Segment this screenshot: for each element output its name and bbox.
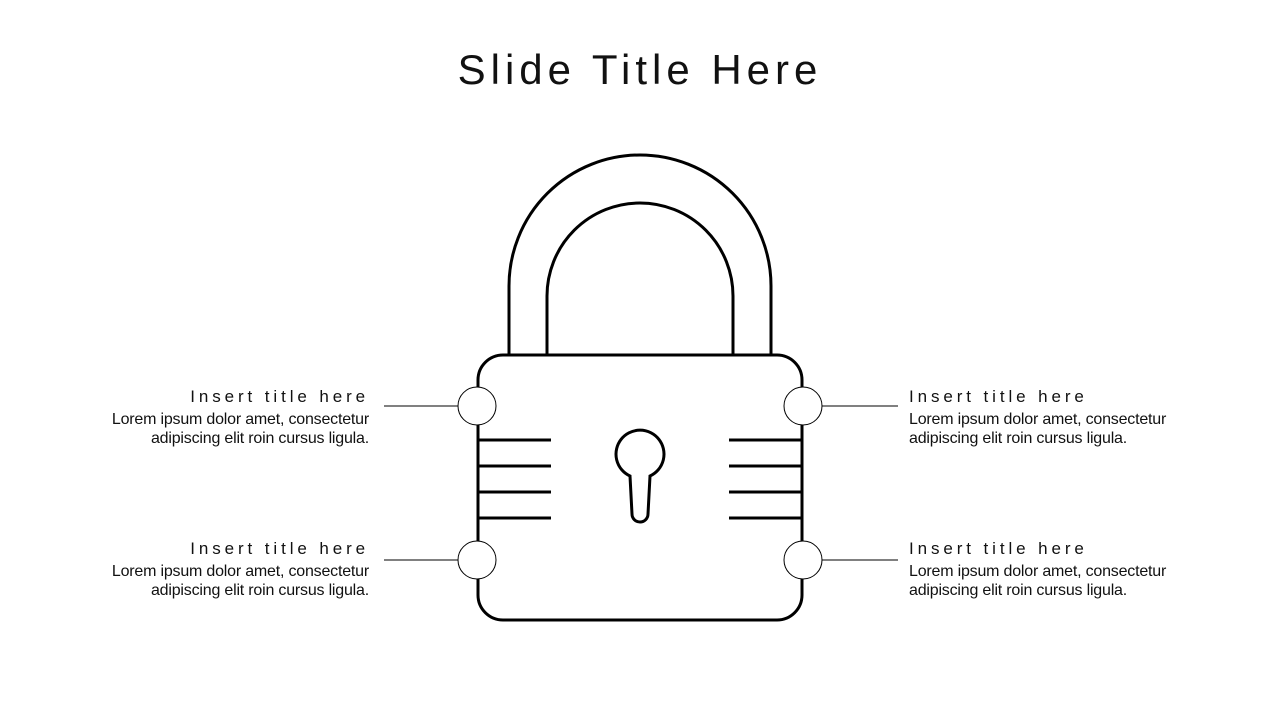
circles — [458, 387, 822, 579]
lock body — [478, 355, 802, 620]
text: bottom left: Lorem ipsum dolor amet, consectetur — [112, 563, 369, 580]
text: bottom right: Insert title here — [909, 539, 1088, 558]
title: Slide Title Here — [458, 46, 822, 93]
text: top right: adipiscing elit roin cursus ligula. — [909, 430, 1127, 447]
text: bottom right: adipiscing elit roin cursus ligula. — [909, 582, 1127, 599]
hatch right — [729, 440, 802, 518]
text: bottom left: Insert title here — [190, 539, 369, 558]
keyhole — [616, 430, 664, 522]
text: top left: Insert title here — [190, 387, 369, 406]
text: bottom left: adipiscing elit roin cursus ligula. — [151, 582, 369, 599]
hatch left — [478, 440, 551, 518]
text: bottom right: Lorem ipsum dolor amet, consectetur — [909, 563, 1166, 580]
text: top right — [909, 387, 1166, 447]
shackle — [509, 155, 771, 355]
text: top left — [112, 387, 369, 447]
text: bottom right — [909, 539, 1166, 599]
text: top right: Lorem ipsum dolor amet, consectetur — [909, 411, 1166, 428]
text: top left: Lorem ipsum dolor amet, consectetur — [112, 411, 369, 428]
text: bottom left — [112, 539, 369, 599]
connector lines — [384, 406, 898, 560]
text: top left: adipiscing elit roin cursus ligula. — [151, 430, 369, 447]
text: top right: Insert title here — [909, 387, 1088, 406]
